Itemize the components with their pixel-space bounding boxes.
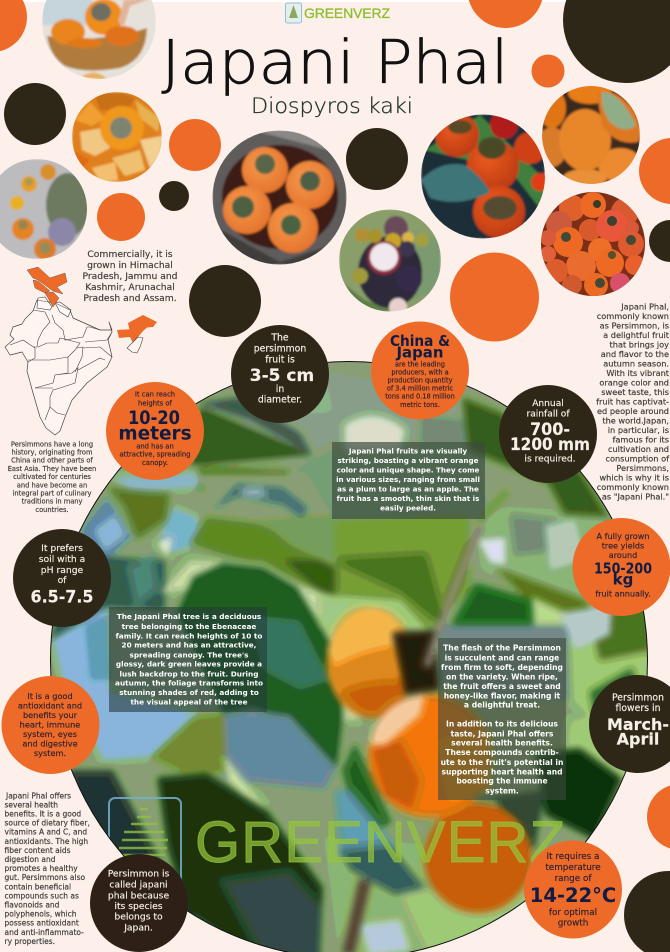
text: intro paragraph: ed people around — [597, 406, 669, 416]
text: intro paragraph: Persimmons, — [616, 463, 669, 473]
callout: fruit size: fruit is — [265, 355, 295, 366]
title: Japani Phal — [162, 28, 508, 98]
callout: leading producers: metric tons. — [400, 401, 440, 409]
callout: name origin: Persimmon is — [108, 868, 170, 879]
callout: fruit size: 3-5 cm — [250, 366, 314, 386]
text: tree description: family. It can reach heights of 10 to — [116, 631, 262, 640]
callout: soil pH: 6.5-7.5 — [30, 588, 94, 608]
text: intro paragraph: Japani Phal, — [620, 302, 669, 312]
text: tree description: autumn, the foliage transforms into — [115, 679, 263, 688]
text: intro paragraph: a delightful fruit — [603, 330, 670, 340]
text: health benefits paragraph: ry properties. — [4, 937, 55, 946]
callout: antioxidant benefits: antioxidant and — [18, 700, 82, 710]
callout: leading producers: of 3.4 million metric — [387, 384, 454, 392]
callout: tree height: 10-20 — [128, 408, 180, 429]
callout: antioxidant benefits — [2, 676, 100, 774]
logo: Greenverz top: GREENVERZ — [304, 5, 390, 21]
text: fruit appearance — [336, 446, 480, 512]
callout: temperature: It requires a — [547, 852, 599, 862]
callout: rainfall: Annual — [532, 399, 564, 409]
photo: pile of orange persimmons — [540, 192, 645, 297]
text: health benefits paragraph: and anti-inflammato- — [4, 928, 84, 937]
text: health benefits paragraph: benefits. It is a good — [4, 810, 81, 818]
text: commercial growing regions: Pradesh, Jammu and — [82, 271, 178, 282]
text: flesh and health benefits: honey-like flavor, making it — [444, 691, 561, 700]
callout: fruit size — [231, 325, 329, 423]
callout: fruit size: persimmon — [254, 344, 306, 355]
text: history of persimmons: cultivated for centuries — [13, 473, 91, 481]
callout: antioxidant benefits: system, eyes — [23, 729, 77, 739]
callout: annual yield: 150-200 — [594, 559, 652, 577]
text: tree description: glossy, dark green leaves provide a — [116, 660, 262, 669]
text: history of persimmons — [8, 440, 96, 514]
text: health benefits paragraph: possess antioxidant — [4, 919, 79, 928]
text: flesh and health benefits: boosting the immune — [456, 777, 548, 786]
callout: flowering: April — [617, 729, 659, 748]
text: health benefits paragraph: fiber content aids — [4, 846, 71, 855]
text: flesh and health benefits: the fruit offers a sweet and — [443, 682, 561, 691]
text: flesh and health benefits: taste, Japani Phal offers — [451, 729, 554, 738]
photo: red persimmons on tree with leaf — [421, 111, 549, 239]
text: tree description — [115, 612, 263, 707]
text: intro paragraph: orange color and — [599, 378, 669, 388]
photo: close-up persimmons — [542, 86, 640, 184]
text: intro paragraph: and flavor to the — [601, 349, 669, 359]
text: intro paragraph: famous for its — [612, 434, 669, 444]
watermark logo text: GREENVERZ — [195, 810, 565, 875]
callout: temperature: range of — [555, 874, 592, 884]
text: flesh and health benefits: system. — [485, 786, 519, 795]
callout: tree height: meters — [118, 424, 192, 444]
callout: soil pH: It prefers — [41, 543, 83, 554]
text: commercial growing regions: Pradesh and Assam. — [83, 293, 177, 304]
text: intro paragraph: With its vibrant — [606, 368, 670, 378]
text: intro paragraph: cultivation and — [608, 444, 669, 454]
callout: fruit size: The — [270, 333, 289, 344]
text: tree description: stunning shades of red, adding to — [119, 688, 259, 697]
text: flesh and health benefits: from firm to soft, depending — [441, 663, 563, 672]
text: fruit appearance: as a plum to large as an apple. The — [337, 485, 479, 494]
text: fruit appearance: Japani Phal fruits are visually — [348, 446, 467, 455]
text: tree description: tree belonging to the Ebenaceae — [122, 622, 256, 631]
callout: leading producers: producers, with a — [391, 368, 449, 376]
callout: annual yield: around — [609, 550, 637, 560]
text: intro paragraph: consumption of — [605, 454, 670, 464]
callout: tree height — [106, 382, 204, 480]
subtitle: Diospyros kaki — [251, 94, 413, 118]
text: intro paragraph — [596, 302, 670, 502]
callout: annual yield: fruit annually. — [595, 588, 651, 598]
callout: antioxidant benefits: system. — [34, 748, 66, 758]
callout: tree height: attractive, spreading — [120, 450, 190, 458]
text: flesh and health benefits: The flesh of the Persimmon — [443, 644, 561, 653]
callout: rainfall: is required. — [524, 455, 576, 465]
callout: antioxidant benefits: It is a good — [27, 691, 73, 701]
callout: name origin: its species — [114, 901, 163, 912]
callout: leading producers: are the leading — [395, 360, 445, 368]
callout: rainfall: 1200 mm — [510, 435, 590, 455]
callout: name origin: called japani — [109, 879, 168, 890]
callout: annual yield: tree yields — [602, 540, 644, 550]
text: health benefits paragraph — [4, 791, 90, 946]
photo: four persimmons in a bowl — [212, 130, 347, 265]
callout: antioxidant benefits: heart, immune — [20, 719, 80, 729]
callout: temperature: for optimal — [549, 908, 597, 918]
text: intro paragraph: fruit has captivat- — [596, 396, 669, 406]
callout: name origin: phal because — [108, 890, 169, 901]
callout: name origin: Japan. — [123, 922, 153, 933]
text: flesh and health benefits — [441, 644, 563, 795]
text: history of persimmons: China and other parts of — [11, 457, 93, 465]
callout: temperature: temperature — [545, 863, 601, 873]
text: intro paragraph: autumn season. — [603, 358, 669, 368]
text: intro paragraph: commonly known — [597, 482, 669, 492]
large circular illustration: persimmon tree branch — [40, 350, 660, 952]
callout: tree height: and has an — [136, 442, 174, 450]
callout: name origin: belongs to — [114, 912, 163, 923]
text: intro paragraph: in particular, is — [608, 425, 669, 435]
callout: soil pH — [13, 529, 111, 627]
watermark logo box — [108, 797, 182, 880]
callout: flowering — [589, 675, 670, 773]
text: health benefits paragraph: Japani Phal offers — [5, 791, 71, 800]
text: flesh and health benefits: In addition to its delicious — [446, 720, 558, 729]
callout: annual yield: A fully grown — [597, 531, 649, 541]
text: commercial growing regions: Commercially, it is — [87, 249, 173, 260]
text panel: tree description — [109, 607, 267, 712]
text: history of persimmons: Persimmons have a long — [11, 440, 93, 448]
callout: annual yield — [572, 518, 670, 616]
callout: leading producers: China & — [390, 332, 450, 350]
photo: persimmons in wicker basket — [42, 0, 156, 80]
text: fruit appearance: easily peeled. — [380, 503, 436, 512]
text: tree description: The Japani Phal tree is a deciduous — [117, 612, 261, 621]
text: history of persimmons: integral part of culinary — [12, 490, 92, 498]
text: flesh and health benefits: These compounds contrib- — [445, 748, 559, 757]
text: health benefits paragraph: digestion and — [4, 855, 56, 864]
text: tree description: the visual appeal of the tree — [130, 698, 248, 707]
photo: persimmons and lavender on grey — [0, 159, 90, 260]
callout: soil pH: pH range — [41, 565, 84, 576]
text: intro paragraph: the world.Japan, — [602, 416, 669, 426]
text: intro paragraph: as Persimmon, is — [600, 320, 669, 330]
callout: fruit size: diameter. — [258, 395, 302, 406]
text: commercial growing regions — [82, 249, 178, 304]
text: health benefits paragraph: source of dietary fiber, — [4, 819, 90, 828]
callout: antioxidant benefits: and digestive — [22, 738, 78, 748]
callout: leading producers: production quantity — [388, 376, 453, 384]
callout: temperature: 14-22°C — [530, 884, 616, 907]
text: flesh and health benefits: on the variety. When ripe, — [446, 672, 558, 681]
text: health benefits paragraph: contain beneficial — [4, 882, 71, 891]
text: intro paragraph: which is why it is — [599, 472, 669, 482]
text: intro paragraph: as "Japani Phal." — [602, 492, 669, 502]
callout: temperature: growth — [558, 919, 588, 929]
photo: mangosteens — [339, 209, 441, 316]
text: history of persimmons: traditions in many — [21, 498, 83, 506]
callout: name origin — [90, 854, 188, 952]
text: health benefits paragraph: gut. Persimmons also — [4, 873, 85, 882]
text: history of persimmons: East Asia. They have been — [8, 465, 96, 473]
text: tree description: spreading canopy. The tree's — [129, 650, 249, 659]
callout: soil pH: soil with a — [39, 554, 85, 565]
callout: temperature — [524, 840, 622, 938]
callout: annual yield: kg — [613, 570, 633, 588]
text: flesh and health benefits: a delightful treat. — [464, 701, 540, 710]
callout: rainfall: rainfall of — [526, 410, 570, 420]
callout: leading producers — [371, 322, 469, 420]
text: fruit appearance: fruit has a smooth, thin skin that is — [337, 494, 479, 503]
text: flesh and health benefits: ute to the fruit's potential in — [441, 758, 563, 767]
text: flesh and health benefits: several health benefits. — [451, 739, 553, 748]
callout: flowering: Persimmon — [612, 692, 664, 703]
callout: fruit size: in — [276, 384, 284, 395]
text panel: flesh and benefits — [438, 638, 566, 800]
callout: leading producers: Japan — [396, 344, 444, 362]
text: health benefits paragraph: promotes a healthy — [4, 864, 78, 873]
text: history of persimmons: history, originating from — [11, 448, 93, 456]
photo: cut persimmon pieces — [72, 92, 162, 182]
text: tree description: lush backdrop to the fruit. During — [120, 669, 258, 678]
text: health benefits paragraph: vitamins A and C, and — [4, 828, 87, 837]
callout: tree height: heights of — [138, 399, 173, 407]
text: commercial growing regions: grown in Himachal — [87, 260, 173, 271]
callout: flowering: March- — [607, 715, 669, 734]
text: intro paragraph: commonly known — [597, 311, 669, 321]
text: history of persimmons: countries. — [35, 506, 69, 514]
text: intro paragraph: that brings joy — [610, 340, 669, 350]
callout: tree height: canopy. — [142, 459, 168, 467]
text: fruit appearance: color and unique shape. They come — [337, 466, 480, 475]
callout: antioxidant benefits: benefits your — [23, 710, 78, 720]
text: commercial growing regions: Kashmir, Arunachal — [85, 282, 175, 293]
text: health benefits paragraph: polyphenols, which — [4, 910, 77, 919]
text: flesh and health benefits: is succulent and can range — [445, 653, 559, 662]
callout: tree height: It can reach — [135, 390, 175, 398]
text: health benefits paragraph: flavonoids and — [4, 900, 60, 910]
callout: rainfall: 700- — [530, 420, 570, 440]
callout: leading producers: tons and 0.18 million — [385, 392, 455, 400]
text: intro paragraph: sweet taste, this — [601, 387, 669, 397]
callout: rainfall — [499, 385, 597, 483]
callout: flowering: flowers in — [616, 703, 661, 714]
map: India with highlighted states — [5, 267, 157, 435]
text: health benefits paragraph: antioxidants. The high — [4, 837, 88, 846]
text: fruit appearance: striking, boasting a vibrant orange — [338, 456, 479, 465]
text: tree description: 20 meters and has an attractive, — [122, 641, 257, 650]
text: history of persimmons: and have become an — [17, 481, 87, 489]
text: fruit appearance: in various sizes, ranging from small — [336, 475, 480, 484]
callout: soil pH: of — [58, 575, 67, 586]
text: health benefits paragraph: compounds such as — [4, 891, 79, 900]
text: health benefits paragraph: several health — [4, 800, 58, 809]
text panel: fruit appearance — [332, 442, 485, 519]
text: flesh and health benefits: supporting heart health and — [441, 767, 563, 776]
logo: Greenverz top — [286, 3, 390, 23]
